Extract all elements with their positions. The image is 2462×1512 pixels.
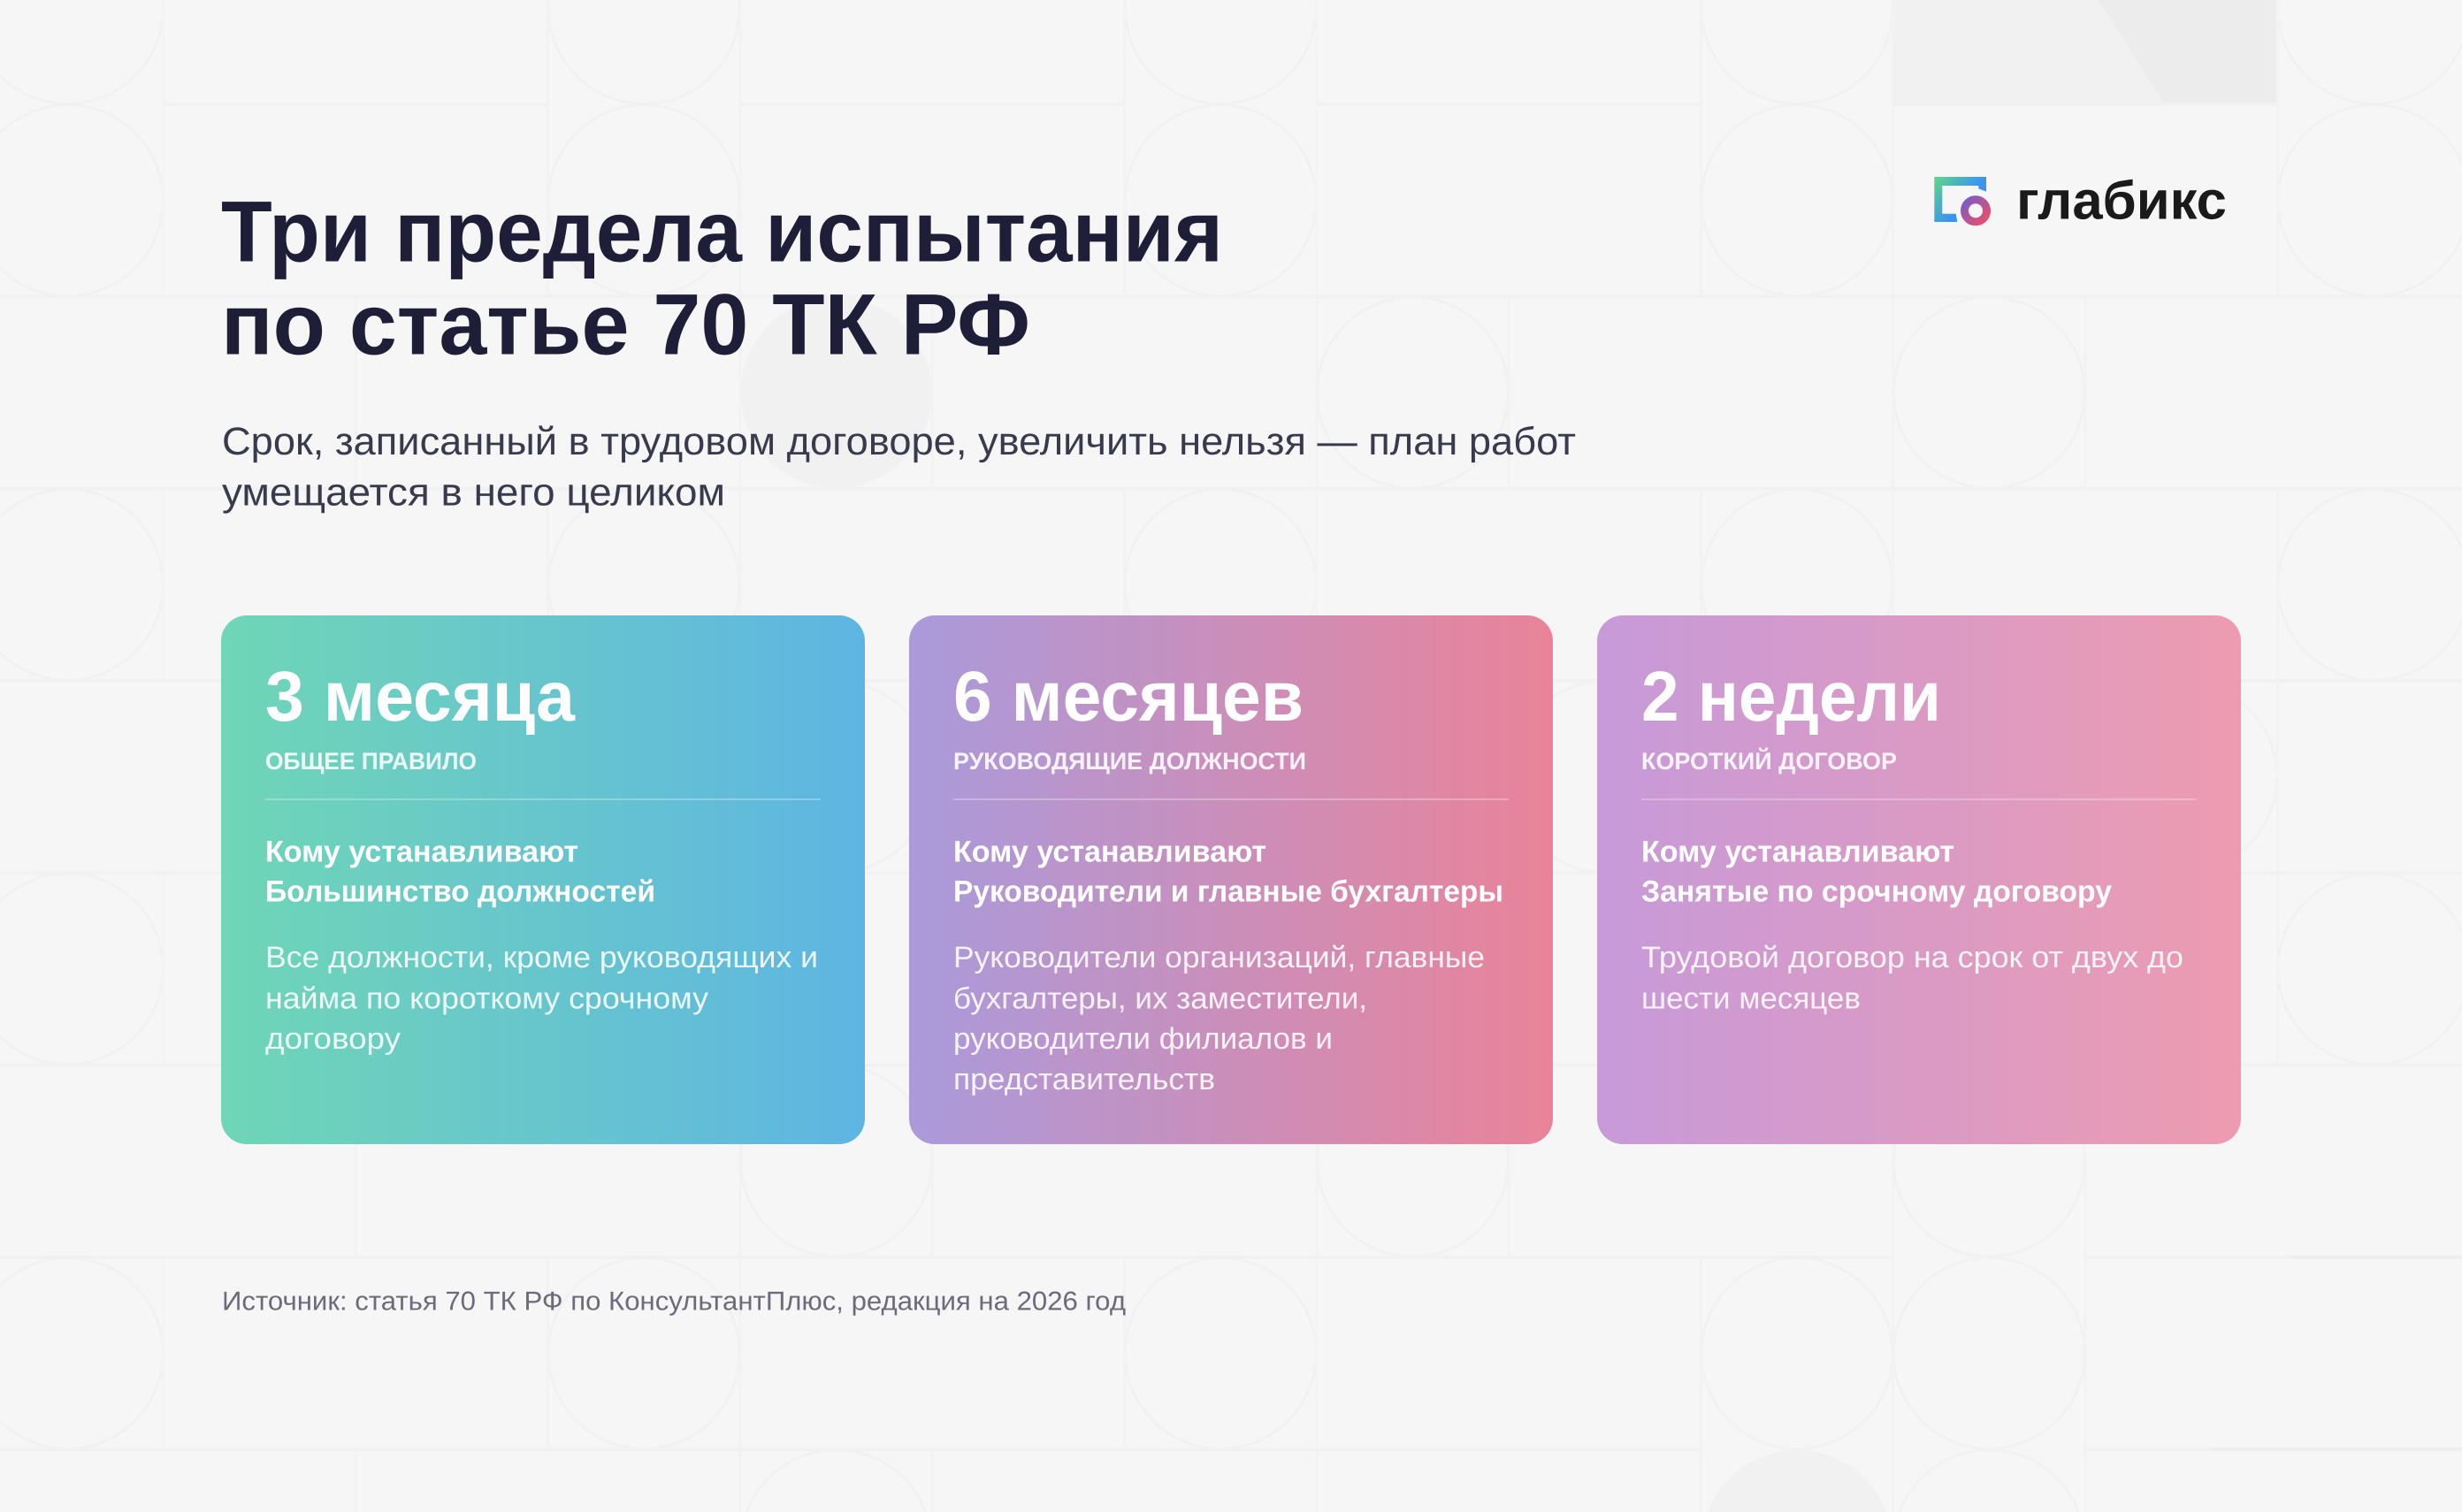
description (953, 941, 1485, 1096)
description: найма по короткому срочному (265, 981, 708, 1015)
subtitle: умещается в него целиком (222, 470, 725, 515)
who it applies to (1641, 836, 2112, 909)
description (265, 941, 818, 1056)
description: шести месяцев (1641, 981, 1861, 1015)
description: договору (265, 1022, 401, 1056)
panel: 2 недели (1597, 615, 2241, 1144)
subtitle (222, 420, 1576, 515)
icon: logo mark (1934, 177, 1986, 222)
card heading: 2 недели (1641, 657, 1941, 736)
who it applies to: Занятые по срочному договору (1641, 875, 2112, 909)
who it applies to: Кому устанавливают (1641, 836, 1954, 869)
card category: ОБЩЕЕ ПРАВИЛО (265, 748, 477, 775)
title: по статье 70 ТК РФ (221, 276, 1030, 373)
description: представительств (953, 1063, 1215, 1096)
description: руководители филиалов и (953, 1022, 1333, 1056)
panel: 3 месяца (221, 615, 865, 1144)
card heading: 3 месяца (265, 657, 576, 736)
who it applies to: Кому устанавливают (265, 836, 578, 869)
description: Руководители организаций, главные (953, 941, 1485, 974)
logo: глабикс (1934, 170, 2227, 230)
card category: РУКОВОДЯЩИЕ ДОЛЖНОСТИ (953, 748, 1306, 775)
panel: 6 месяцев (909, 615, 1553, 1144)
source note: Источник: статья 70 ТК РФ по КонсультантПлюс, редакция на 2026 год (222, 1287, 1126, 1317)
who it applies to: Большинство должностей (265, 875, 655, 909)
title (221, 182, 1223, 373)
description: Трудовой договор на срок от двух до (1641, 941, 2183, 974)
who it applies to (953, 836, 1503, 909)
card heading: 6 месяцев (953, 657, 1304, 736)
description (1641, 941, 2183, 1015)
who it applies to (265, 836, 655, 909)
subtitle: Срок, записанный в трудовом договоре, увеличить нельзя — план работ (222, 420, 1576, 463)
who it applies to: Руководители и главные бухгалтеры (953, 875, 1503, 909)
description: Все должности, кроме руководящих и (265, 941, 818, 974)
card category: КОРОТКИЙ ДОГОВОР (1641, 747, 1897, 775)
title: Три предела испытания (221, 182, 1223, 279)
description: бухгалтеры, их заместители, (953, 981, 1367, 1015)
logo wordmark: глабикс (2016, 170, 2227, 230)
who it applies to: Кому устанавливают (953, 836, 1266, 869)
